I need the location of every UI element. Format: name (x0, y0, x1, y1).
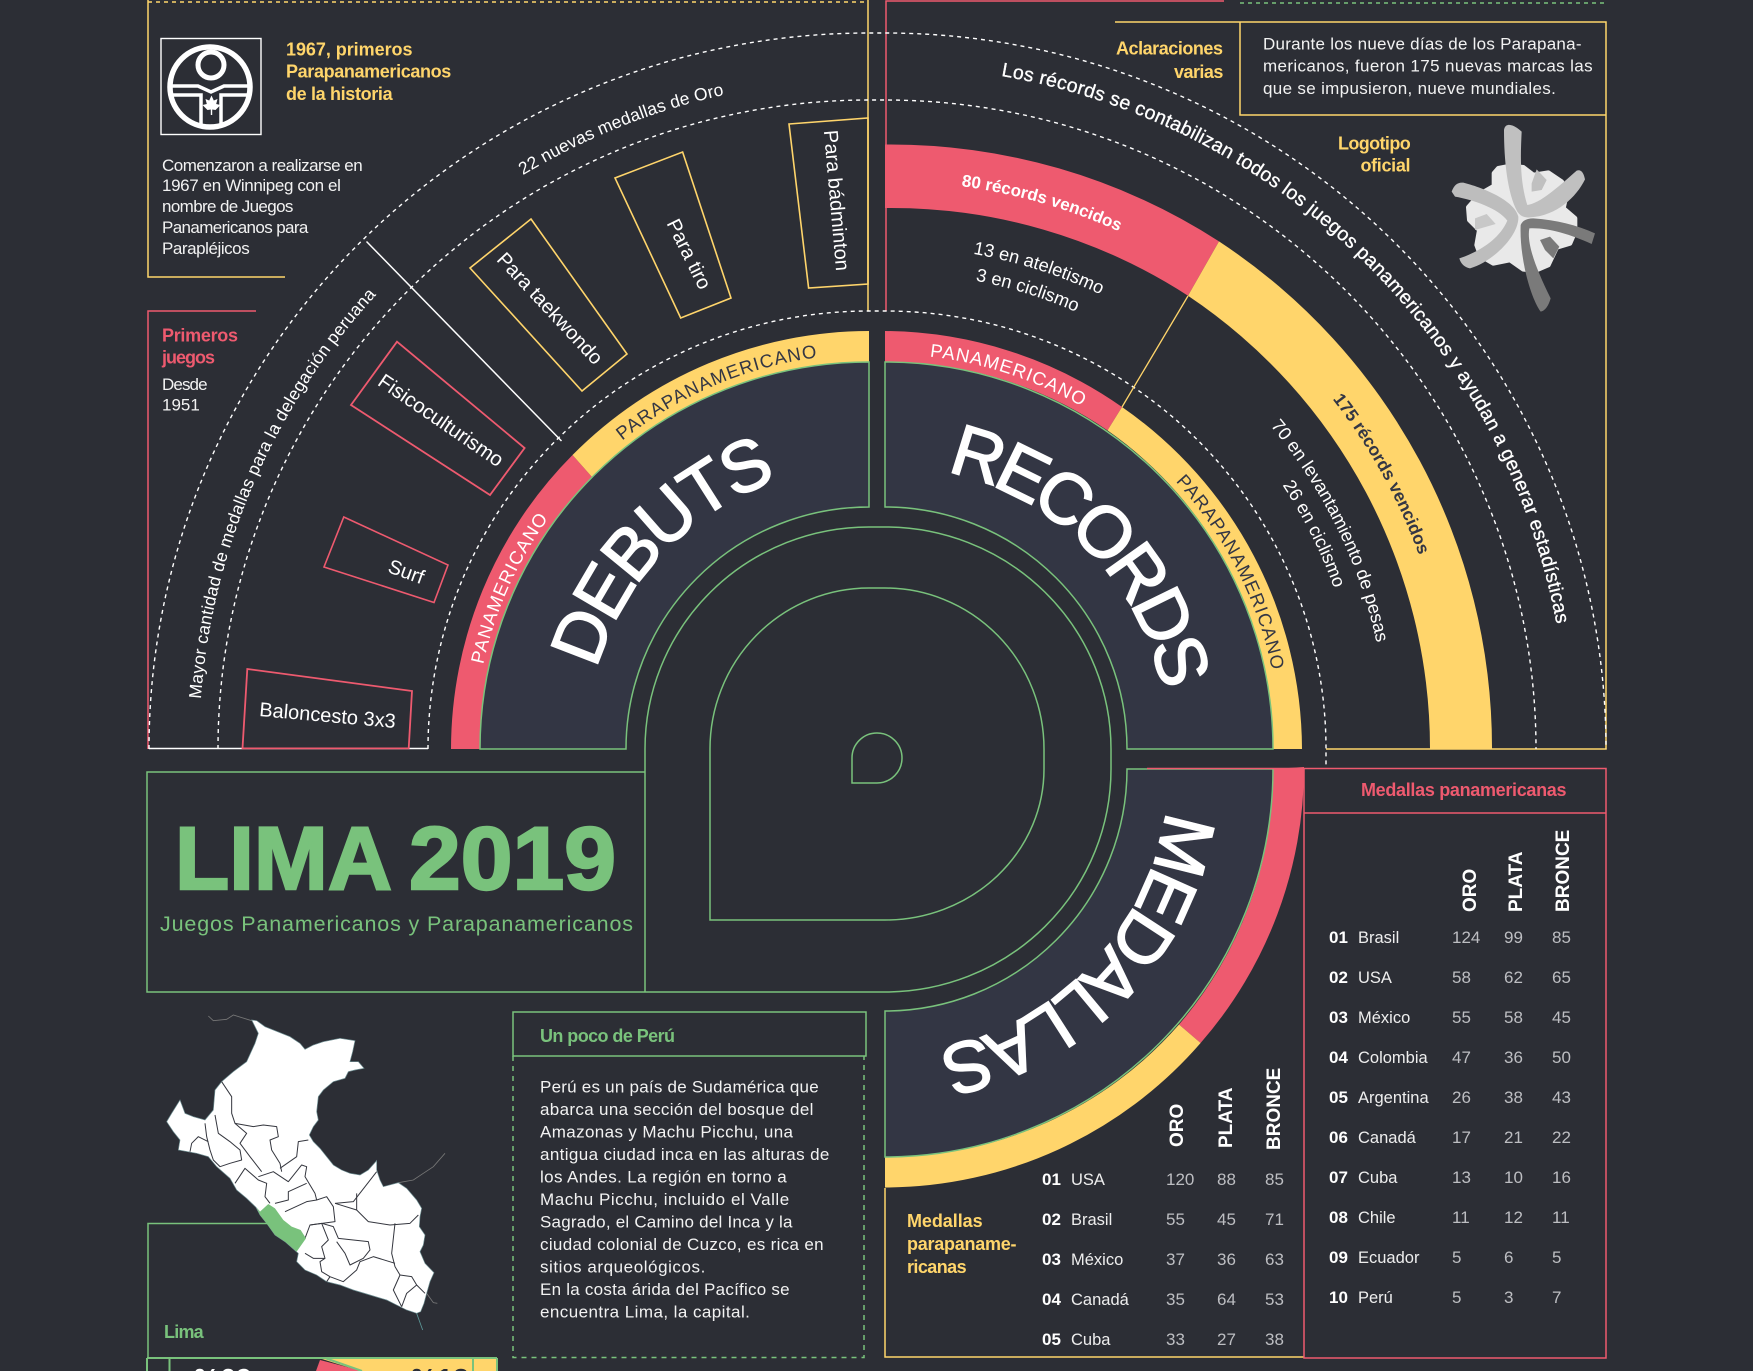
heading: Medallas panamericanas (1361, 780, 1566, 800)
text arc: 13 en ateletismo: 13 en ateletismo (974, 242, 1103, 293)
table: parapanamerican: 63 (1265, 1250, 1284, 1269)
table: panamerican: 45 (1552, 1008, 1571, 1027)
table: panamerican: 13 (1452, 1168, 1471, 1187)
text block: 1967: Comenzaron a realizarse en (162, 156, 363, 175)
label: panamericano: PANAMERICANO (931, 344, 1086, 404)
debut: baloncesto 3x3: Baloncesto 3x3 (258, 699, 397, 733)
text block: peru: sitios arqueológicos. (540, 1258, 705, 1277)
chart: outer records band (885, 144, 1492, 749)
text block: desde 1951 (162, 375, 208, 414)
panel: debuts (451, 331, 870, 750)
table headers (1460, 830, 1574, 912)
table headers (1167, 1068, 1285, 1150)
heading: primeros juegos: juegos (161, 348, 215, 368)
heading: primeros juegos: Primeros (162, 326, 238, 346)
title panel (147, 749, 885, 992)
text block: 1967 (162, 156, 363, 258)
table headers: PLATA (1506, 851, 1527, 912)
text block: durante (1263, 34, 1593, 98)
table: panamerican: Argentina (1358, 1089, 1429, 1107)
table: panamerican: 5 (1452, 1248, 1461, 1267)
text block: peru: antigua ciudad inca en las alturas de (540, 1145, 829, 1164)
panel: records (884, 331, 1302, 750)
debut: para taekwondo: Para taekwondo (492, 249, 607, 369)
table: panamerican: 99 (1504, 928, 1523, 947)
label: parapanamericano: PARAPANAMERICANO (616, 346, 816, 440)
table: panamerican: Canadá (1358, 1129, 1417, 1147)
table headers: BRONCE (1553, 830, 1574, 912)
heading: un poco de peru: Un poco de Perú (540, 1026, 675, 1046)
text block: peru: En la costa árida del Pacífico se (540, 1280, 790, 1299)
icon: 1967 games logo (161, 38, 261, 134)
table: panamerican: 47 (1452, 1048, 1471, 1067)
bottom cropped chart (147, 1358, 497, 1371)
panel: medallas (884, 767, 1304, 1188)
table: panamerican: 09 (1329, 1248, 1348, 1267)
label: lima: Lima (164, 1322, 205, 1342)
heading: aclaraciones (1116, 38, 1223, 82)
table: parapanamerican (1042, 1170, 1284, 1349)
text arc: delegation: Mayor cantidad de medallas para la delegación peruana (189, 290, 376, 698)
text arc: new gold medals: 22 nuevas medallas de Oro (518, 86, 723, 175)
table: parapanamerican: Brasil (1071, 1211, 1112, 1229)
table: panamerican: Cuba (1358, 1169, 1398, 1187)
table: parapanamerican: 88 (1217, 1170, 1236, 1189)
label: panamericano: PANAMERICANO (471, 514, 546, 663)
panel: panamerican medals (1147, 768, 1606, 1358)
frame: red top right line (886, 1, 1224, 311)
subtitle: Juegos Panamericanos y Parapanamericanos (160, 912, 633, 936)
text arc: 26 en ciclismo: 26 en ciclismo (1282, 480, 1342, 586)
debut: fisicoculturismo (351, 342, 525, 495)
table headers: BRONCE (1264, 1068, 1285, 1150)
text block: peru: Machu Picchu, incluido el Valle (540, 1190, 789, 1209)
table: panamerican: 21 (1504, 1128, 1523, 1147)
table: parapanamerican: Cuba (1071, 1331, 1111, 1349)
text block: peru: Perú es un país de Sudamérica que (540, 1078, 819, 1097)
region: lima (257, 1204, 306, 1252)
table: parapanamerican: 27 (1217, 1330, 1236, 1349)
text arc: records statement: Los récords se contabilizan todos los juegos panamericanos y ayudan a generar estadísticas (1002, 62, 1566, 624)
table: panamerican: 03 (1329, 1008, 1348, 1027)
gold divider line (1122, 296, 1188, 407)
text block: durante: mericanos, fueron 175 nuevas marcas las (1263, 56, 1593, 76)
text block: 1967: nombre de Juegos (162, 197, 293, 216)
table: parapanamerican: 02 (1042, 1210, 1061, 1229)
heading: 1967: 1967, primeros (286, 40, 412, 60)
table: parapanamerican: USA (1071, 1171, 1105, 1189)
table headers: ORO (1167, 1104, 1188, 1147)
debut: para badminton: Para bádminton (819, 129, 853, 272)
table: panamerican: 10 (1329, 1288, 1348, 1307)
table: panamerican: Ecuador (1358, 1249, 1420, 1267)
title: 2019 (409, 808, 616, 908)
text arc: 80 records: 80 récords vencidos (962, 175, 1121, 230)
frame: red primeros juegos section (148, 311, 256, 749)
frame: gold top-left section (148, 0, 868, 311)
table: panamerican: Brasil (1358, 929, 1399, 947)
heading: 1967 (286, 40, 451, 104)
table: panamerican: 38 (1504, 1088, 1523, 1107)
text block: peru (540, 1078, 829, 1322)
table: panamerican: 6 (1504, 1248, 1513, 1267)
text block: durante: que se impusieron, nueve mundiales. (1263, 79, 1556, 98)
table: panamerican: 3 (1504, 1288, 1513, 1307)
table: panamerican: 22 (1552, 1128, 1571, 1147)
table: parapanamerican: 38 (1265, 1330, 1284, 1349)
table: parapanamerican: 85 (1265, 1170, 1284, 1189)
center rings (645, 527, 1111, 992)
table: panamerican: 58 (1504, 1008, 1523, 1027)
debut: fisicoculturismo: Fisicoculturismo (374, 370, 508, 472)
icon: official logo (1452, 125, 1595, 312)
table headers: PLATA (1216, 1087, 1237, 1148)
table: parapanamerican: 05 (1042, 1330, 1061, 1349)
debut: baloncesto 3x3 (242, 669, 412, 748)
table: parapanamerican: 33 (1166, 1330, 1185, 1349)
table: parapanamerican: 37 (1166, 1250, 1185, 1269)
debut: para tiro: Para tiro (662, 216, 715, 293)
text block: 1967: 1967 en Winnipeg con el (162, 176, 341, 195)
text block: 1967: Parapléjicos (162, 239, 250, 258)
table: parapanamerican: 35 (1166, 1290, 1185, 1309)
text block: peru: los Andes. La región en torno a (540, 1168, 787, 1187)
heading: logotipo: Logotipo (1338, 134, 1411, 154)
table: panamerican: 43 (1552, 1088, 1571, 1107)
table: panamerican: 05 (1329, 1088, 1348, 1107)
text block: peru: Sagrado, el Camino del Inca y la (540, 1213, 793, 1232)
table: parapanamerican: 71 (1265, 1210, 1284, 1229)
table: parapanamerican: 36 (1217, 1250, 1236, 1269)
heading: records: RECORDS (951, 424, 1208, 686)
table: parapanamerican: 120 (1166, 1170, 1194, 1189)
debut: surf: Surf (385, 556, 427, 589)
table: parapanamerican: Canadá (1071, 1291, 1130, 1309)
table: panamerican: 85 (1552, 928, 1571, 947)
table headers: ORO (1460, 869, 1481, 912)
table: panamerican: 10 (1504, 1168, 1523, 1187)
heading: debuts: DEBUTS (550, 438, 771, 664)
text block: desde 1951: 1951 (162, 396, 200, 414)
heading (907, 1211, 1016, 1277)
text arc: 70 en levantamiento: 70 en levantamiento de pesas (1272, 418, 1386, 642)
text block: 1967: Panamericanos para (162, 218, 309, 237)
heading: ricanas (907, 1257, 967, 1277)
table: panamerican: 12 (1504, 1208, 1523, 1227)
table: panamerican: 55 (1452, 1008, 1471, 1027)
table: panamerican: 11 (1452, 1208, 1470, 1227)
table: panamerican: 5 (1452, 1288, 1461, 1307)
debut: para badminton (789, 118, 868, 288)
text block: peru: abarca una sección del bosque del (540, 1100, 813, 1119)
table: panamerican: 50 (1552, 1048, 1571, 1067)
heading: logotipo (1338, 134, 1411, 176)
map: peru (167, 1015, 445, 1330)
table: panamerican: 7 (1552, 1288, 1561, 1307)
table: parapanamerican: 53 (1265, 1290, 1284, 1309)
heading: Medallas (907, 1211, 983, 1231)
white dividers (149, 242, 562, 748)
text block: durante: Durante los nueve días de los Parapana- (1263, 34, 1582, 54)
heading: 1967: Parapanamericanos (286, 62, 451, 82)
table: panamerican: 36 (1504, 1048, 1523, 1067)
panel: lima label (148, 1224, 270, 1358)
table: panamerican: 16 (1552, 1168, 1571, 1187)
table: panamerican (1329, 928, 1571, 1307)
panel: parapanamerican medals (885, 1068, 1304, 1357)
text arc: 175 records: 175 récords vencidos (1333, 394, 1427, 554)
heading: logotipo: oficial (1360, 156, 1410, 176)
text block: peru: ciudad colonial de Cuzco, es rica en (540, 1235, 824, 1254)
title: LIMA (175, 808, 392, 908)
title (175, 808, 616, 908)
heading: medallas: MEDALLAS (944, 816, 1215, 1094)
debut: surf (324, 517, 448, 602)
heading: parapaname- (907, 1234, 1016, 1254)
table: parapanamerican: 45 (1217, 1210, 1236, 1229)
dashed arcs (149, 33, 1606, 765)
text block: peru: encuentra Lima, la capital. (540, 1303, 750, 1322)
debut: para tiro (615, 152, 731, 318)
table: panamerican: 06 (1329, 1128, 1348, 1147)
table: panamerican: 17 (1452, 1128, 1471, 1147)
table: parapanamerican: 55 (1166, 1210, 1185, 1229)
table: panamerican: 04 (1329, 1048, 1348, 1067)
heading: aclaraciones: Aclaraciones (1116, 38, 1223, 58)
table: panamerican: 5 (1552, 1248, 1561, 1267)
heading: primeros juegos (161, 326, 238, 368)
frame: gold right section (1115, 22, 1606, 749)
table: panamerican: 11 (1552, 1208, 1570, 1227)
table: panamerican: 65 (1552, 968, 1571, 987)
table: parapanamerican: 03 (1042, 1250, 1061, 1269)
heading: 1967: de la historia (286, 84, 394, 104)
table: parapanamerican: México (1071, 1251, 1123, 1269)
text block: desde 1951: Desde (162, 375, 208, 394)
text block: peru: Amazonas y Machu Picchu, una (540, 1123, 794, 1142)
table: parapanamerican: 01 (1042, 1170, 1061, 1189)
text arc: 3 en ciclismo: 3 en ciclismo (976, 269, 1078, 311)
table: panamerican: 07 (1329, 1168, 1348, 1187)
table: panamerican: Colombia (1358, 1049, 1429, 1067)
table: panamerican: 02 (1329, 968, 1348, 987)
debut: para taekwondo (470, 219, 627, 391)
table: panamerican: Chile (1358, 1209, 1396, 1227)
heading: aclaraciones: varias (1174, 62, 1223, 82)
panel: un poco de peru (513, 1012, 866, 1358)
table: panamerican: Perú (1358, 1289, 1393, 1307)
table: parapanamerican: 04 (1042, 1290, 1061, 1309)
label: parapanamericano: PARAPANAMERICANO (1176, 474, 1284, 668)
table: panamerican: 58 (1452, 968, 1471, 987)
table: panamerican: 08 (1329, 1208, 1348, 1227)
table: panamerican: USA (1358, 969, 1392, 987)
table: panamerican: 01 (1329, 928, 1348, 947)
table: panamerican: 62 (1504, 968, 1523, 987)
table: panamerican: 124 (1452, 928, 1480, 947)
frame: green dashed top (1240, 2, 1607, 4)
table: parapanamerican: 64 (1217, 1290, 1236, 1309)
table: panamerican: 26 (1452, 1088, 1471, 1107)
table: panamerican: México (1358, 1009, 1410, 1027)
